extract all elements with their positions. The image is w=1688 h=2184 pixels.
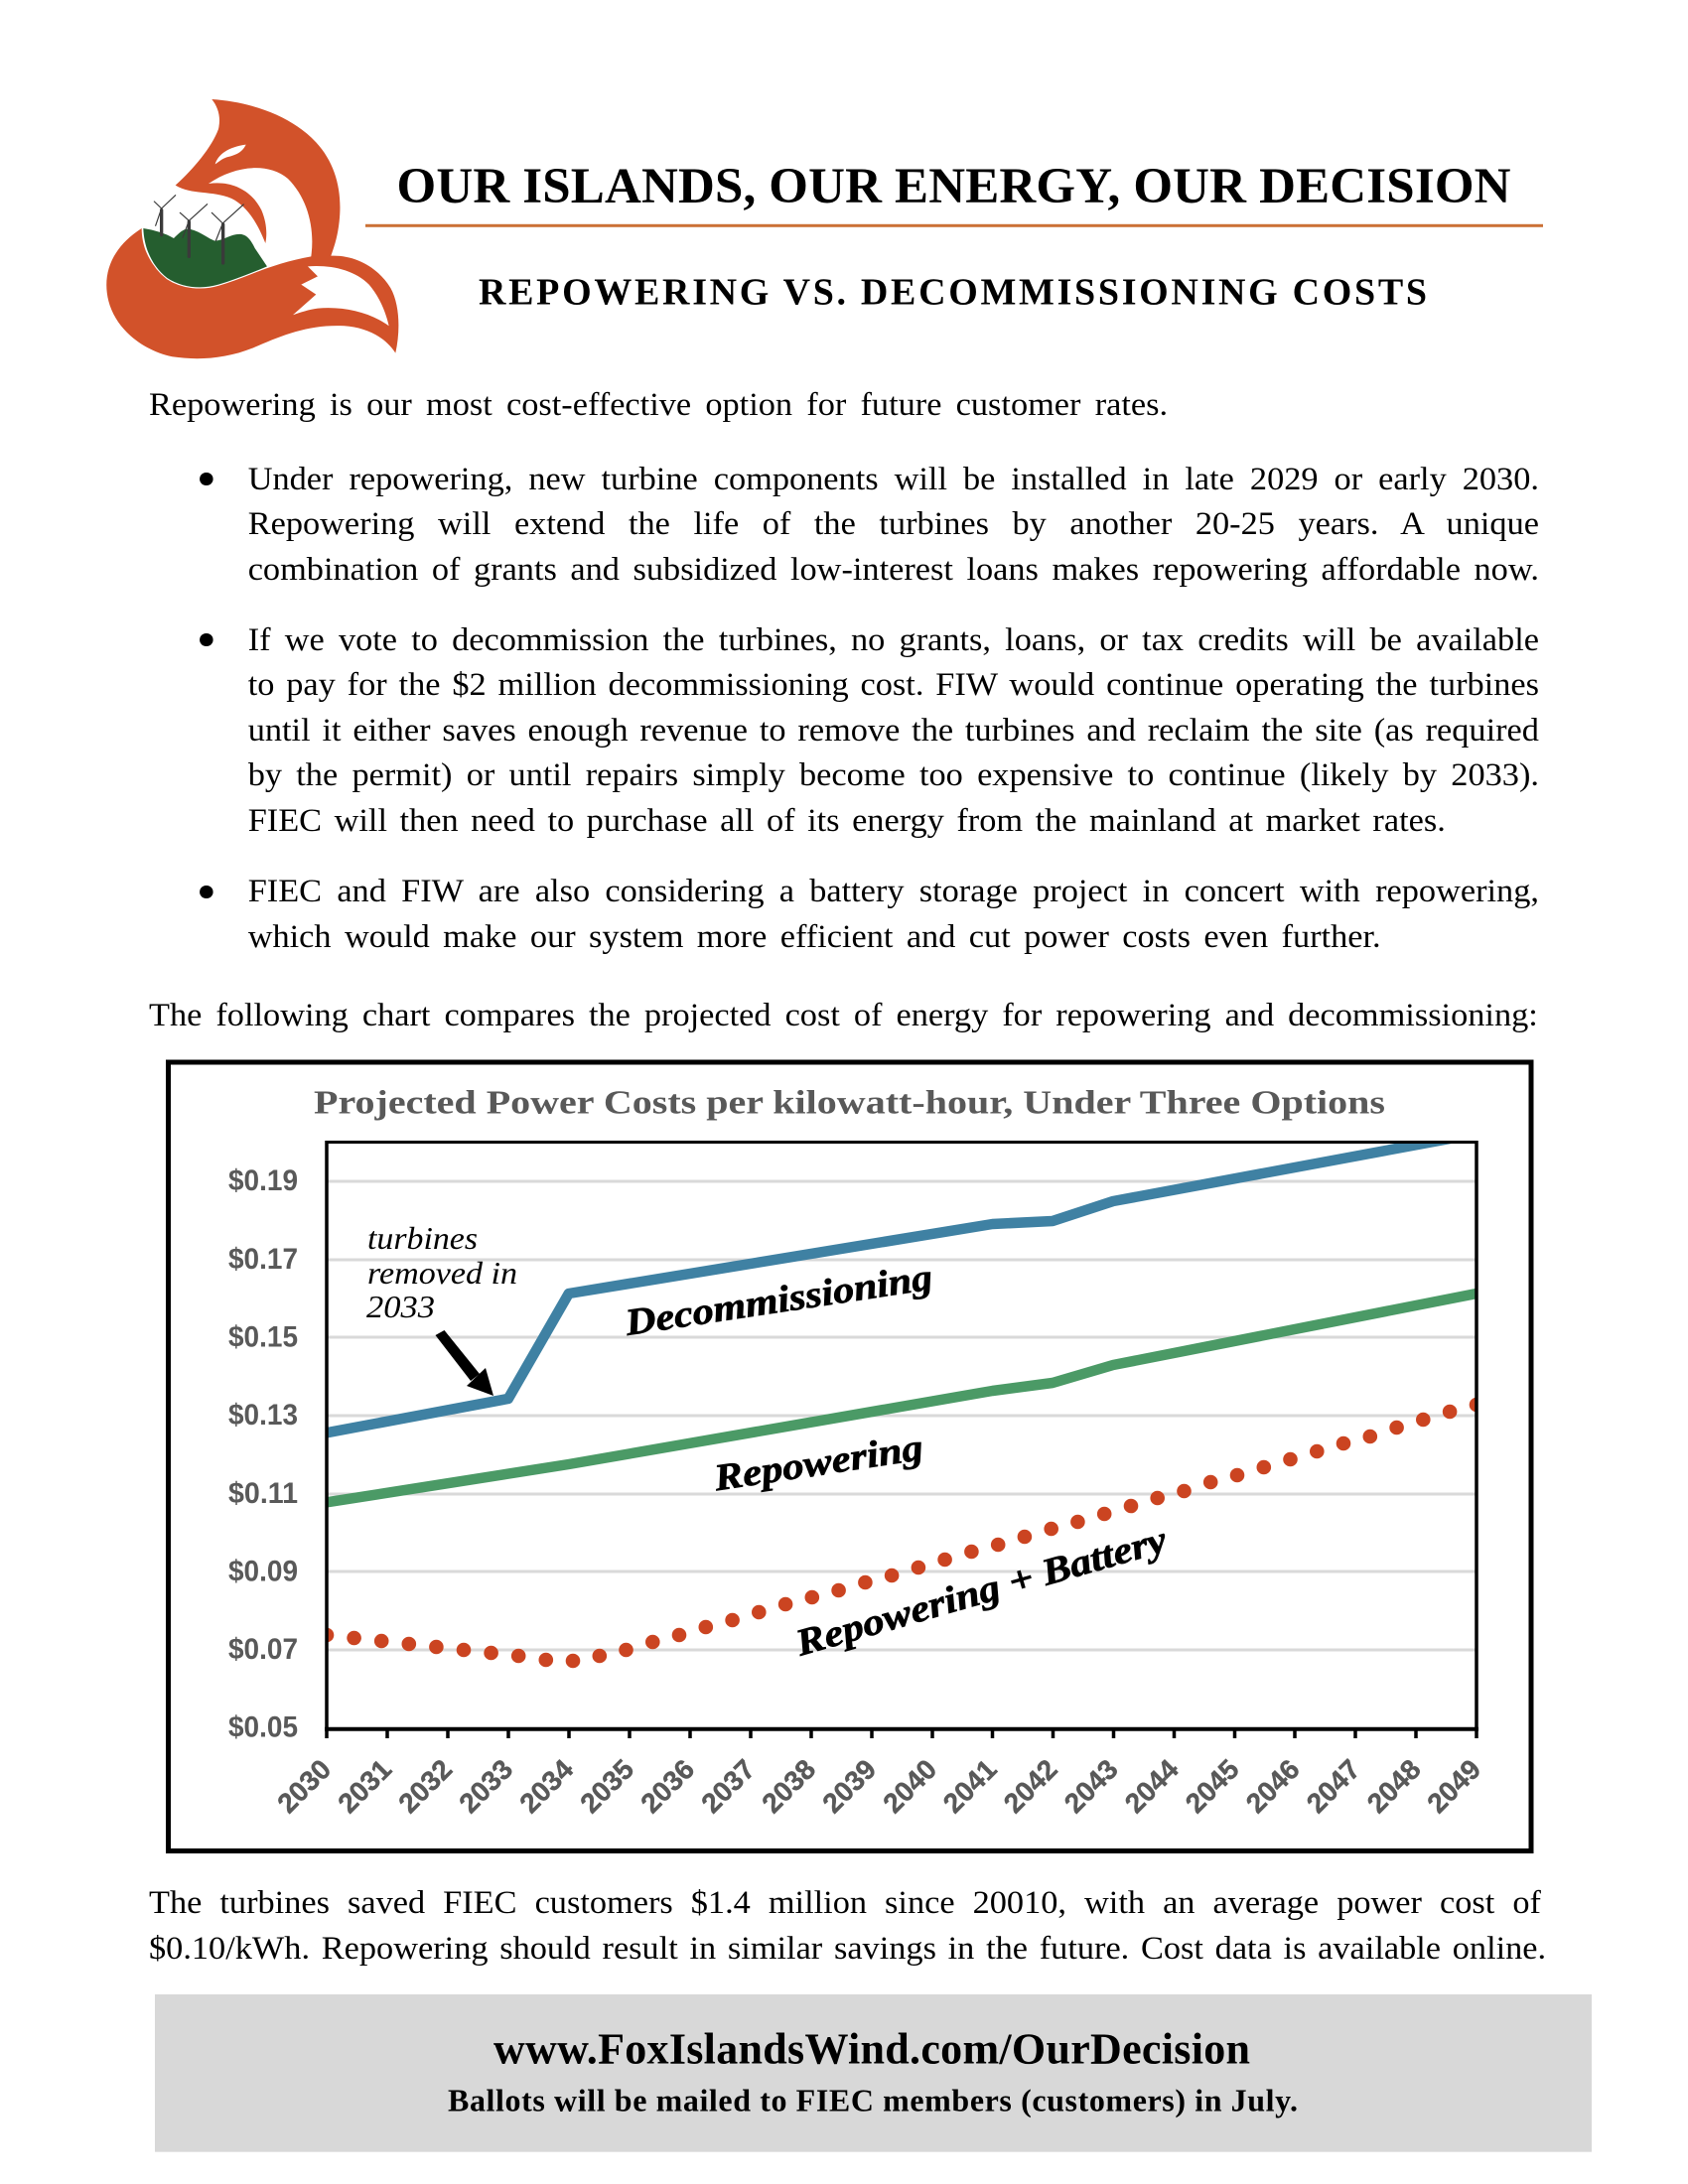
x axis labels: 2044 — [1119, 1753, 1185, 1819]
x axis labels — [271, 1753, 1486, 1819]
closing paragraph — [149, 1885, 1546, 1966]
x axis labels: 2032 — [392, 1753, 458, 1819]
chart title: Projected Power Costs per kilowatt-hour, Under Three Options — [314, 1084, 1385, 1122]
chart lead-in sentence: The following chart compares the projected cost of energy for repowering and decommissioning: — [149, 998, 1538, 1033]
bullet: decommissioning consequences — [200, 622, 1539, 839]
bullet: decommissioning consequences: FIEC will then need to purchase all of its energy from the mainland at market rates. — [248, 803, 1446, 839]
y axis labels — [228, 1164, 298, 1743]
series: repowering plus battery — [320, 1398, 1483, 1668]
annotation: turbines removed in 2033 — [366, 1220, 517, 1324]
closing paragraph: $0.10/kWh. Repowering should result in similar savings in the future. Cost data is available online. — [149, 1930, 1546, 1966]
x axis labels: 2040 — [877, 1753, 942, 1819]
x axis labels: 2042 — [998, 1753, 1063, 1819]
plot border and x axis ticks — [325, 1141, 1478, 1738]
turbines — [154, 196, 243, 263]
fox tail tip — [293, 266, 389, 326]
series: repowering — [323, 1292, 1484, 1503]
footer url: www.FoxIslandsWind.com/OurDecision — [493, 2024, 1250, 2073]
x axis labels: 2033 — [453, 1753, 518, 1819]
bullet: battery storage — [200, 874, 1539, 955]
footer panel — [155, 1994, 1592, 2152]
bullet: battery storage: FIEC and FIW are also considering a battery storage project in concert with repowering, — [248, 874, 1539, 909]
bullet: repowering schedule: Under repowering, new turbine components will be installed in late 2029 or early 2030. — [248, 462, 1539, 497]
logo: fox with wind turbines — [106, 99, 398, 358]
closing paragraph: The turbines saved FIEC customers $1.4 million since 20010, with an average power cost of — [149, 1885, 1541, 1921]
annotation: turbines removed in 2033: turbines — [367, 1220, 478, 1256]
bullet: repowering schedule: combination of grants and subsidized low-interest loans makes repowering affordable now. — [248, 552, 1539, 588]
x axis labels: 2045 — [1180, 1753, 1245, 1819]
series: decommissioning — [323, 1134, 1477, 1433]
bullet: decommissioning consequences: until it either saves enough revenue to remove the turbines and reclaim the site (as required — [248, 713, 1539, 749]
title: OUR ISLANDS, OUR ENERGY, OUR DECISION — [397, 159, 1511, 214]
bullet: decommissioning consequences: If we vote to decommission the turbines, no grants, loans, or tax credits will be available — [248, 622, 1539, 658]
x axis labels: 2043 — [1058, 1753, 1124, 1819]
green island — [143, 228, 267, 287]
x axis labels: 2037 — [695, 1753, 761, 1819]
bullet: repowering schedule: Repowering will extend the life of the turbines by another 20-25 years. A unique — [248, 506, 1539, 542]
arrow to 2033 — [435, 1330, 493, 1396]
x axis labels: 2041 — [937, 1753, 1003, 1819]
x axis labels: 2047 — [1301, 1753, 1366, 1819]
y axis labels: $0.15 — [228, 1320, 298, 1354]
y axis labels: $0.19 — [228, 1164, 298, 1197]
y axis labels: $0.07 — [228, 1633, 298, 1666]
label: decommissioning: Decommissioning — [622, 1257, 935, 1344]
y axis labels: $0.17 — [228, 1243, 298, 1276]
fox body — [106, 99, 398, 358]
x axis labels: 2046 — [1240, 1753, 1306, 1819]
x axis labels: 2036 — [634, 1753, 700, 1819]
footer background — [155, 1994, 1592, 2152]
bullet: decommissioning consequences: by the permit) or until repairs simply become too expensive to continue (likely by 2033). — [248, 757, 1539, 793]
x axis labels: 2030 — [271, 1753, 337, 1819]
intro paragraph: Repowering is our most cost-effective option for future customer rates. — [149, 387, 1168, 423]
annotation: turbines removed in 2033: removed in — [367, 1255, 517, 1291]
subtitle: REPOWERING VS. DECOMMISSIONING COSTS — [479, 272, 1427, 314]
y axis labels: $0.09 — [228, 1555, 298, 1588]
bullet: battery storage: which would make our system more efficient and cut power costs even further. — [248, 919, 1381, 955]
y axis labels: $0.13 — [228, 1399, 298, 1432]
x axis labels: 2038 — [756, 1753, 821, 1819]
chart panel — [169, 1062, 1531, 1850]
gridlines — [327, 1181, 1477, 1650]
chart frame — [169, 1062, 1531, 1850]
x axis labels: 2049 — [1421, 1753, 1486, 1819]
y axis labels: $0.11 — [228, 1477, 298, 1510]
x axis labels: 2035 — [574, 1753, 639, 1819]
label: repowering: Repowering — [710, 1427, 925, 1500]
x axis labels: 2034 — [513, 1753, 580, 1819]
title rule — [365, 224, 1543, 227]
x axis labels: 2039 — [816, 1753, 882, 1819]
footer ballots note: Ballots will be mailed to FIEC members (customers) in July. — [448, 2083, 1298, 2118]
fox eye — [215, 145, 246, 164]
bullet: repowering schedule — [200, 462, 1539, 588]
x axis labels: 2031 — [332, 1753, 397, 1819]
y axis labels: $0.05 — [228, 1711, 298, 1743]
annotation: turbines removed in 2033: 2033 — [366, 1289, 435, 1324]
bullet: decommissioning consequences: to pay for the $2 million decommissioning cost. FIW would continue operating the turbines — [248, 667, 1539, 703]
x axis labels: 2048 — [1361, 1753, 1427, 1819]
label: repowering plus battery: Repowering + Battery — [790, 1519, 1172, 1665]
